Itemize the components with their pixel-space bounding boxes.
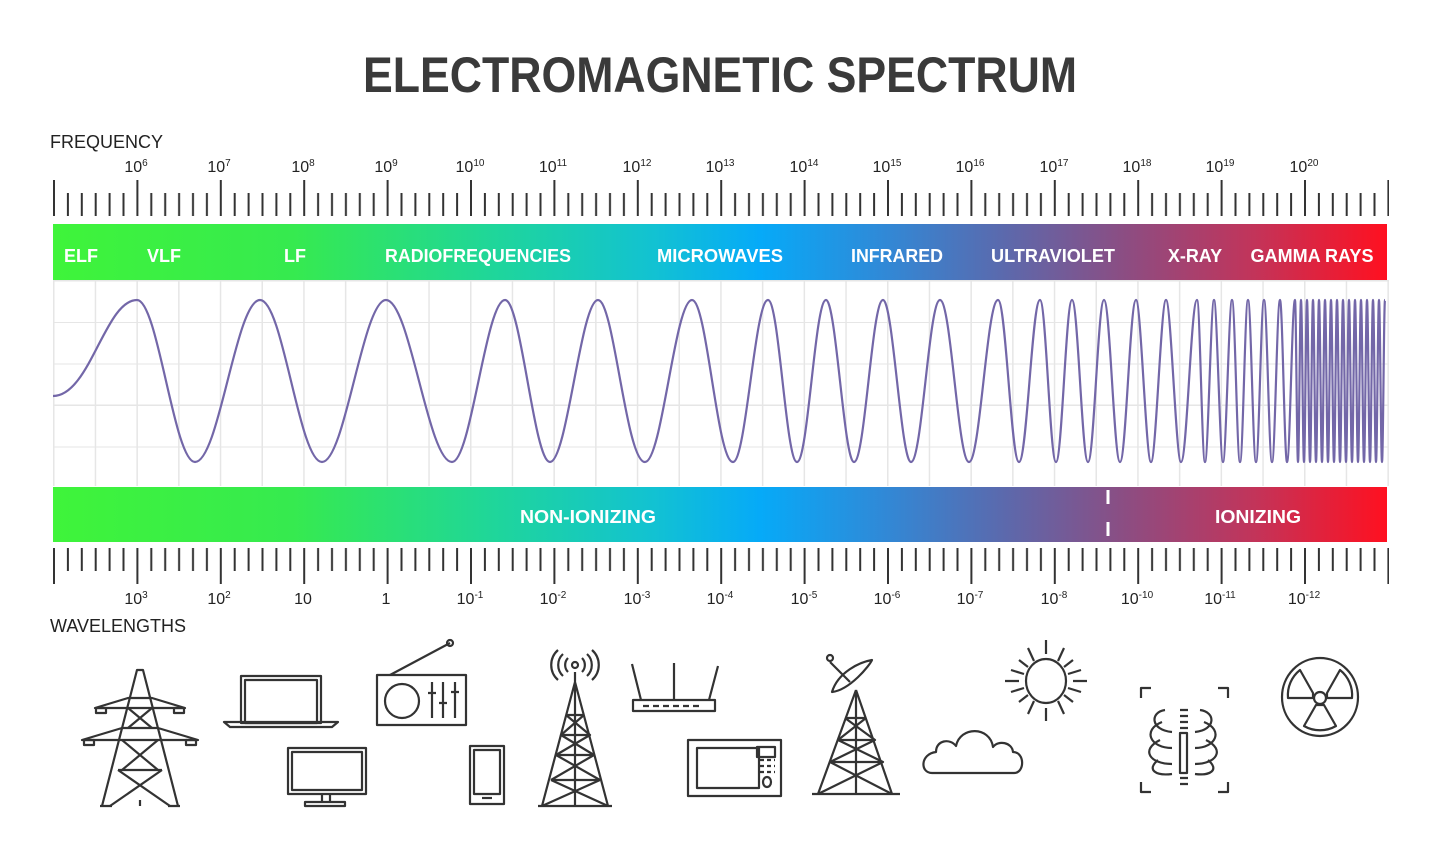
wavelength labels: -6: [891, 590, 901, 601]
icon: microwave: [688, 740, 781, 796]
frequency labels: 10: [1123, 159, 1140, 176]
wavelength labels: -11: [1222, 590, 1236, 601]
wavelength labels: 10: [294, 591, 312, 608]
frequency labels: 19: [1223, 158, 1235, 169]
wavelength labels: 10: [1204, 591, 1222, 608]
title: ELECTROMAGNETIC SPECTRUM: [363, 47, 1077, 103]
wavelength labels: 2: [225, 590, 231, 601]
frequency ruler: [52, 180, 1389, 216]
icon: router: [632, 663, 718, 711]
wavelength labels: 10: [457, 591, 474, 608]
icon: x-ray chest: [1141, 688, 1228, 792]
frequency labels: [124, 158, 1319, 176]
spectrum band bar: ELF: [64, 246, 98, 266]
icon: power pylon: [82, 670, 198, 806]
frequency labels: 10: [706, 159, 723, 176]
wavelength labels: -5: [808, 590, 818, 601]
icon: cell tower: [538, 650, 612, 806]
wavelength labels: [124, 590, 1321, 608]
spectrum band bar: [53, 224, 1387, 280]
wavelength labels: -4: [724, 590, 734, 601]
ionizing bar: [53, 487, 1387, 542]
frequency labels: 10: [873, 159, 890, 176]
frequency labels: 12: [640, 158, 652, 169]
icon: satellite dish tower: [812, 655, 900, 794]
frequency labels: 7: [225, 158, 231, 169]
icon: laptop: [224, 676, 338, 727]
spectrum band bar: INFRARED: [851, 246, 943, 266]
frequency labels: 10: [207, 159, 225, 176]
wavelength labels: -12: [1306, 590, 1321, 601]
wavelength labels: 10: [1041, 591, 1058, 608]
frequency labels: 13: [723, 158, 735, 169]
icon: monitor: [288, 748, 366, 806]
frequency labels: 16: [973, 158, 985, 169]
ionizing bar: IONIZING: [1215, 507, 1301, 527]
frequency labels: 10: [790, 159, 807, 176]
frequency labels: 10: [623, 159, 640, 176]
wavelength labels: -3: [641, 590, 651, 601]
frequency labels: 17: [1057, 158, 1069, 169]
frequency labels: 20: [1307, 158, 1319, 169]
spectrum band bar: GAMMA RAYS: [1250, 246, 1374, 266]
icon: phone: [470, 746, 504, 804]
wavelength labels: 10: [207, 591, 225, 608]
frequency labels: 6: [142, 158, 148, 169]
frequency labels: 10: [456, 159, 473, 176]
wavelength labels: 10: [874, 591, 891, 608]
spectrum band bar: LF: [284, 246, 306, 266]
frequency labels: 10: [956, 159, 973, 176]
wavelength labels: 10: [791, 591, 808, 608]
frequency labels: 10: [539, 159, 557, 176]
wavelength labels: 10: [624, 591, 641, 608]
wavelength labels: 1: [382, 591, 391, 608]
wavelength labels: 10: [540, 591, 557, 608]
spectrum band bar: RADIOFREQUENCIES: [385, 246, 571, 266]
wavelength labels: -10: [1139, 590, 1154, 601]
frequency labels: 10: [1040, 159, 1057, 176]
icon: radiation symbol: [1282, 658, 1358, 736]
wavelength labels: -7: [974, 590, 984, 601]
frequency labels: 10: [374, 159, 392, 176]
wavelength labels: 10: [124, 591, 142, 608]
frequency heading: FREQUENCY: [50, 132, 163, 152]
frequency labels: 10: [291, 159, 309, 176]
frequency labels: 14: [807, 158, 819, 169]
spectrum band bar: VLF: [147, 246, 181, 266]
spectrum band bar: X-RAY: [1168, 246, 1222, 266]
frequency labels: 10: [1206, 159, 1223, 176]
icon: cloud: [923, 731, 1022, 773]
wavelength labels: 10: [957, 591, 974, 608]
wavelengths heading: WAVELENGTHS: [50, 616, 186, 636]
frequency labels: 15: [890, 158, 902, 169]
frequency labels: 9: [392, 158, 398, 169]
icon: radio: [377, 640, 466, 725]
wavelength labels: -2: [557, 590, 567, 601]
wavelength ruler: [52, 548, 1389, 584]
wavelength labels: 10: [1121, 591, 1139, 608]
spectrum band bar: MICROWAVES: [657, 246, 783, 266]
frequency labels: 11: [557, 158, 568, 169]
wavelength labels: 10: [1288, 591, 1306, 608]
icon: sun: [1005, 640, 1087, 721]
frequency labels: 10: [473, 158, 485, 169]
wavelength labels: -1: [474, 590, 484, 601]
wave chart: [53, 280, 1389, 486]
frequency labels: 10: [1290, 159, 1307, 176]
frequency labels: 18: [1140, 158, 1152, 169]
frequency labels: 10: [124, 159, 142, 176]
wavelength labels: 3: [142, 590, 148, 601]
wavelength labels: -8: [1058, 590, 1068, 601]
spectrum band bar: ULTRAVIOLET: [991, 246, 1115, 266]
frequency labels: 8: [309, 158, 315, 169]
ionizing bar: NON-IONIZING: [520, 507, 656, 527]
wavelength labels: 10: [707, 591, 724, 608]
